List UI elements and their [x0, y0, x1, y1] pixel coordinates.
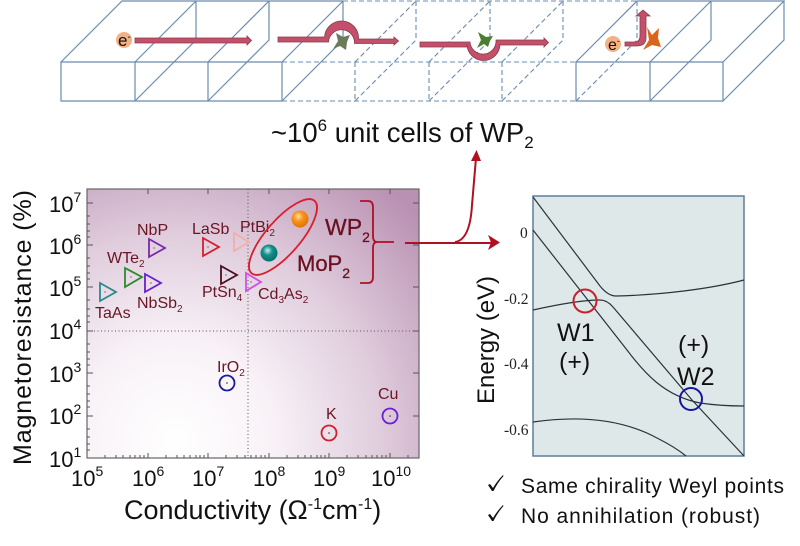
W2 chirality: (+)	[678, 331, 709, 359]
point 2: No annihilation (robust)	[521, 505, 760, 528]
arrow 4 bent back	[625, 10, 650, 46]
W1 chirality: (+)	[559, 348, 590, 376]
x tick labels: 8	[277, 463, 285, 479]
energy tick labels: -0.6	[504, 422, 529, 439]
defect star grey green	[333, 33, 350, 50]
plot area	[533, 196, 744, 456]
y tick labels: 10	[49, 192, 73, 217]
check 1	[488, 475, 504, 491]
material labels: 2	[177, 304, 183, 315]
y tick labels: 2	[73, 401, 81, 417]
notes: bullet points	[488, 475, 784, 528]
y tick labels	[49, 189, 81, 472]
dashed unit cells middle	[282, 1, 637, 101]
material labels: IrO	[217, 359, 239, 376]
x tick labels: 10	[371, 466, 395, 491]
material labels	[95, 219, 398, 423]
arrow 3 dip under defect	[420, 38, 548, 60]
material labels: Cu	[378, 386, 398, 403]
material labels: 4	[237, 293, 243, 304]
check 2	[488, 505, 504, 521]
energy tick labels: -0.4	[504, 356, 529, 373]
heading: unit cells: unit cells of WP	[327, 117, 524, 148]
x tick labels: 9	[337, 463, 345, 479]
triangle markers	[100, 233, 261, 301]
electron 1: e	[118, 31, 127, 50]
heading: unit cells: 2	[524, 133, 534, 152]
defect star orange	[643, 27, 661, 50]
x axis title: )	[372, 495, 381, 525]
ticks	[87, 189, 419, 458]
material labels: PtSn	[202, 284, 237, 301]
x tick labels: 6	[156, 463, 164, 479]
electron 2: e	[608, 37, 617, 54]
energy tick labels: 0	[520, 225, 528, 242]
WP2 label: 2	[362, 229, 370, 245]
MoP2 label: 2	[342, 265, 350, 281]
material labels: Cd	[258, 286, 278, 303]
x axis title: Conductivity (Ω	[124, 495, 308, 525]
defect star green	[477, 32, 493, 48]
y tick labels: 7	[73, 189, 81, 205]
material labels: WTe	[107, 250, 139, 267]
MoP2 marker	[260, 244, 278, 262]
x tick labels: 7	[216, 463, 224, 479]
solid unit cells right	[576, 1, 784, 101]
x tick labels	[71, 463, 411, 491]
MoP2 label: MoP	[297, 251, 342, 276]
diagram: electron scattering through unit cells	[61, 1, 784, 101]
solid unit cells left	[61, 1, 343, 101]
y tick labels: 10	[49, 319, 73, 344]
y tick labels: 10	[49, 404, 73, 429]
material labels: TaAs	[95, 305, 131, 322]
band curves	[533, 197, 744, 456]
W2 label: W2	[677, 363, 714, 391]
highlight ellipse	[239, 190, 327, 284]
x axis title: -1	[358, 496, 372, 513]
heading: unit cells: ~10	[271, 117, 318, 148]
W1 label: W1	[557, 319, 594, 347]
material labels: 2	[239, 368, 245, 379]
electron 2: -	[617, 36, 620, 46]
x tick labels: 10	[192, 466, 216, 491]
x tick labels: 10	[395, 463, 411, 479]
y tick labels: 1	[73, 444, 81, 460]
material labels: PtBi	[240, 219, 269, 236]
y tick labels: 3	[73, 359, 81, 375]
plot background	[87, 189, 419, 458]
y tick labels: 10	[49, 447, 73, 472]
y tick labels: 4	[73, 316, 81, 332]
chart: band structure energy plot	[473, 196, 744, 456]
marker centre dots	[104, 246, 391, 434]
y axis title: Magnetoresistance (%)	[9, 190, 37, 465]
electron 2	[605, 36, 621, 54]
energy tick labels	[504, 225, 529, 439]
material labels: NbP	[137, 222, 168, 239]
arrow 2 hump over defect	[278, 21, 398, 45]
arrow 1 straight	[135, 36, 252, 45]
circle markers	[220, 376, 398, 440]
y tick labels: 10	[49, 362, 73, 387]
material labels: 2	[139, 259, 145, 270]
material labels: 3	[278, 295, 284, 306]
WP2 label: WP	[325, 214, 362, 240]
energy tick labels: -0.2	[504, 291, 529, 308]
material labels: 2	[269, 228, 275, 239]
chart: magnetoresistance vs conductivity	[9, 189, 419, 525]
x tick labels: 10	[71, 466, 95, 491]
brace	[360, 201, 394, 283]
WP2 marker	[292, 210, 308, 228]
W1 circle	[574, 290, 596, 312]
point 1: Same chirality Weyl points	[521, 475, 784, 498]
material labels: NbSb	[137, 295, 177, 312]
x tick labels: 10	[313, 466, 337, 491]
x tick labels: 10	[253, 466, 277, 491]
W2 circle	[680, 388, 702, 410]
x axis title: cm	[322, 495, 358, 525]
heading: unit cells: 6	[318, 116, 327, 135]
material labels: K	[326, 406, 337, 423]
x tick labels: 10	[132, 466, 156, 491]
arrow: to top heading and band plot	[405, 150, 500, 250]
y tick labels: 6	[73, 231, 81, 247]
y tick labels: 5	[73, 273, 81, 289]
electron 1: -	[127, 32, 131, 43]
material labels: As	[284, 286, 303, 303]
material labels: LaSb	[192, 221, 229, 238]
material labels: 2	[303, 295, 309, 306]
y tick labels: 10	[49, 234, 73, 259]
energy axis title: Energy (eV)	[473, 276, 500, 404]
electron 1	[116, 31, 132, 50]
x tick labels: 5	[95, 463, 103, 479]
x axis title: -1	[308, 496, 322, 513]
y tick labels: 10	[49, 276, 73, 301]
